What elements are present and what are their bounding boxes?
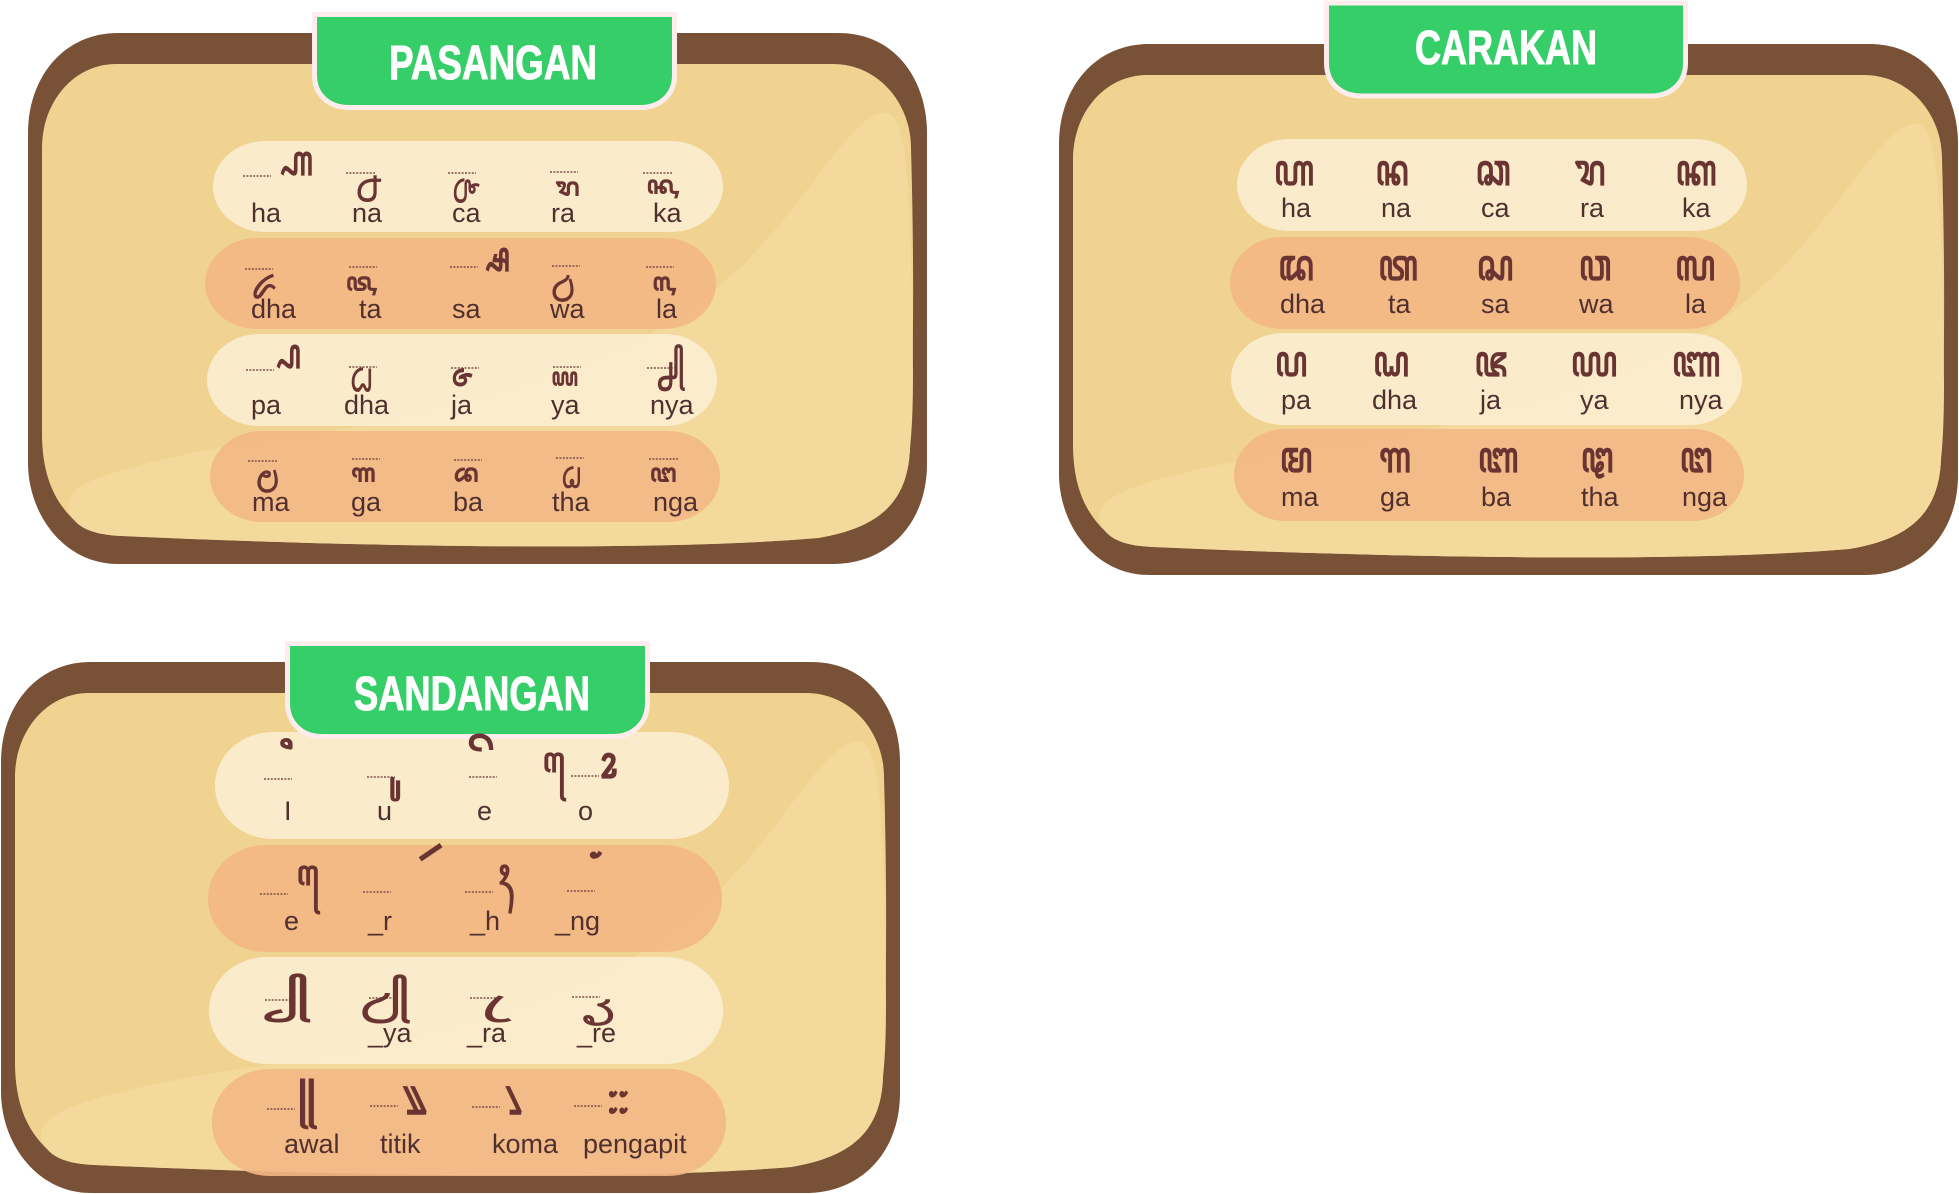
row pill: sandangan row 4 — [212, 1069, 726, 1176]
panel: sandangan — [1, 644, 900, 1193]
mark: pengapit — [574, 1070, 687, 1159]
letter: pasangan ka: ka — [653, 198, 682, 228]
letter: pasangan ya — [551, 341, 581, 420]
letter: pasangan ca — [448, 149, 482, 228]
mark: taling e: e — [284, 906, 299, 936]
letter: pasangan la: la — [656, 294, 678, 324]
letter: pasangan ra: ra — [551, 198, 576, 228]
letter: pasangan ba: ba — [453, 487, 484, 517]
row pill: carakan row 1 — [1237, 139, 1747, 231]
letter: pasangan ha — [243, 137, 313, 228]
mark: layar r: _r — [367, 906, 392, 936]
mark: keret re — [572, 972, 616, 1048]
letter: carakan ta: ꦠ — [1378, 242, 1418, 290]
row pill: sandangan row 1 — [215, 732, 729, 839]
letter: carakan ya: ꦪ — [1571, 338, 1617, 386]
mark: cecak ng: _ng — [554, 906, 600, 936]
row pill: carakan row 4 — [1234, 429, 1744, 521]
panel frame: carakan — [1059, 44, 1958, 575]
mark: pepet e: ꦼ — [468, 734, 502, 785]
letter: pasangan ga: ga — [351, 487, 382, 517]
mark: suku u — [367, 753, 400, 826]
row pill: pasangan row 4 — [210, 431, 720, 522]
mark: wulu I: ꦶ — [280, 736, 303, 783]
mark: cecak ng: ꦁ — [590, 842, 604, 905]
letter: carakan ka: ꦏ — [1675, 147, 1717, 195]
mark: taling tarung o — [542, 739, 617, 826]
letter: pasangan nya: nya — [650, 390, 695, 420]
letter: carakan ga — [1379, 434, 1411, 512]
letter: carakan ra: ꦫ — [1575, 147, 1605, 195]
heading tab: CARAKAN: CARAKAN — [1415, 22, 1597, 75]
letter: carakan ca: ca — [1481, 193, 1510, 223]
mark: pangkon: ꧀ — [265, 962, 310, 1022]
letter: carakan dha: dha — [1372, 385, 1418, 415]
letter: carakan na: na — [1381, 193, 1412, 223]
panel: carakan — [1059, 3, 1958, 575]
letter: carakan dha — [1372, 338, 1418, 415]
letter: carakan na — [1375, 147, 1412, 223]
letter: pasangan ma: ꧀ꦩ — [258, 440, 278, 493]
mark: taling tarung o: ꦴ — [589, 739, 617, 788]
letter: pasangan nga: ꧀ꦔ — [651, 438, 677, 482]
letter: carakan nga — [1680, 434, 1728, 512]
letter: carakan tha — [1581, 434, 1620, 512]
row pill: sandangan row 2 — [208, 845, 722, 952]
mark: pengkal ya — [362, 963, 413, 1048]
letter: carakan sa — [1477, 242, 1513, 319]
letter: carakan ta — [1378, 242, 1418, 319]
row pill: pasangan row 2 — [205, 238, 716, 329]
letter: pasangan ga: ꧀ꦒ — [352, 438, 376, 482]
letter: pasangan tha — [552, 441, 591, 517]
letter: carakan ma — [1280, 434, 1319, 512]
mark: wignyan h: _h — [469, 906, 500, 936]
heading tab: PASANGAN — [314, 14, 674, 108]
mark: pengapit: ꧇꧇ — [607, 1070, 629, 1127]
mark: koma: ꧈ — [505, 1069, 522, 1126]
mark: pengkal ya: _ya — [367, 1018, 413, 1048]
letter: pasangan ta: ta — [359, 294, 383, 324]
letter: carakan ka: ka — [1682, 193, 1712, 223]
mark: cecak ng — [554, 842, 604, 936]
mark: taling e — [260, 854, 328, 936]
mark: cakra ra: ꦿ — [482, 992, 512, 1023]
letter: pasangan ca: ca — [452, 198, 482, 228]
mark: titik: ꧉ — [403, 1069, 427, 1126]
letter: pasangan ma: ma — [252, 487, 290, 517]
letter: carakan wa: wa — [1578, 289, 1614, 319]
letter: pasangan ta: ꧀ꦠ — [347, 247, 377, 295]
mark: taling e: ꦺ — [296, 854, 328, 915]
mark: koma — [472, 1069, 559, 1159]
row pill: pasangan row 1 — [213, 141, 723, 232]
mark: keret re: ꦽ — [583, 972, 613, 1026]
letter: pasangan ja — [450, 330, 479, 420]
mark: titik: titik — [380, 1129, 421, 1159]
mark: wignyan h — [465, 853, 514, 936]
letter: carakan na: ꦤ — [1375, 147, 1409, 195]
letter: carakan ca — [1475, 147, 1511, 223]
letter: carakan tha: tha — [1581, 482, 1620, 512]
letter: carakan ca: ꦕ — [1475, 147, 1511, 195]
letter: pasangan na: ꧀ꦤ — [358, 149, 381, 202]
heading tab: SANDANGAN: SANDANGAN — [354, 668, 590, 721]
letter: pasangan ya: ya — [551, 390, 580, 420]
letter: pasangan sa: sa — [452, 294, 482, 324]
letter: carakan la — [1675, 242, 1715, 319]
mark: taling tarung o: o — [578, 796, 593, 826]
letter: pasangan ka: ꧀ꦏ — [648, 150, 679, 198]
mark: taling tarung o: ꦺ — [542, 741, 574, 802]
letter: pasangan nya: ꧀ꦚ — [658, 333, 685, 391]
letter: carakan ra — [1575, 147, 1605, 223]
mark: wignyan h: ꦃ — [490, 853, 514, 914]
heading tab: CARAKAN — [1326, 3, 1686, 96]
letter: pasangan na: na — [352, 198, 383, 228]
letter: carakan pa: ꦥ — [1275, 338, 1307, 386]
mark: awal — [267, 1066, 340, 1159]
letter: carakan ba: ba — [1481, 482, 1512, 512]
letter: carakan wa — [1578, 242, 1614, 319]
letter: pasangan nga: nga — [653, 487, 699, 517]
letter: pasangan dha: ꧀ꦝ — [352, 339, 372, 392]
letter: carakan ma: ꦩ — [1280, 434, 1312, 482]
letter: carakan nya: ꦚ — [1672, 338, 1720, 386]
letter: carakan pa — [1275, 338, 1312, 415]
letter: pasangan sa — [450, 233, 510, 324]
letter: pasangan ka — [643, 150, 682, 228]
mark: awal: awal — [284, 1129, 340, 1159]
letter: carakan ja — [1474, 338, 1508, 415]
heading tab: PASANGAN: PASANGAN — [389, 37, 597, 90]
mark: suku u: ꦸ — [386, 753, 400, 801]
letter: carakan nya — [1672, 338, 1724, 415]
letter: carakan ma: ma — [1281, 482, 1319, 512]
letter: pasangan pa — [246, 330, 301, 420]
letter: pasangan dha: dha — [344, 390, 390, 420]
letter: carakan ta: ta — [1388, 289, 1412, 319]
letter: carakan ya — [1571, 338, 1617, 415]
letter: pasangan ga — [351, 438, 382, 517]
letter: pasangan da — [245, 246, 297, 324]
panel frame: pasangan — [28, 33, 927, 564]
mark: keret re: _re — [576, 1018, 616, 1048]
letter: carakan sa: sa — [1481, 289, 1510, 319]
letter: pasangan ma — [248, 440, 290, 517]
letter: pasangan nga — [649, 438, 699, 517]
mark: titik — [370, 1069, 427, 1159]
letter: carakan pa: pa — [1281, 385, 1312, 415]
letter: carakan wa: ꦮ — [1579, 242, 1611, 290]
letter: pasangan da: dha — [251, 294, 297, 324]
letter: pasangan tha: tha — [552, 487, 591, 517]
mark: suku u: u — [377, 796, 392, 826]
mark: awal: ꧋ — [297, 1066, 317, 1129]
letter: carakan la: la — [1685, 289, 1707, 319]
row pill: carakan row 2 — [1230, 237, 1740, 329]
letter: pasangan la — [646, 247, 678, 324]
letter: pasangan wa: wa — [549, 294, 585, 324]
letter: carakan sa: ꦱ — [1477, 242, 1513, 290]
letter: carakan ba — [1478, 434, 1518, 512]
letter: pasangan dha — [344, 339, 390, 420]
mark: cakra ra — [466, 992, 512, 1048]
row pill: pasangan row 3 — [207, 334, 717, 426]
letter: carakan nga: nga — [1682, 482, 1728, 512]
letter: carakan ka — [1675, 147, 1717, 223]
letter: carakan ra: ra — [1580, 193, 1605, 223]
mark: layar r: ꦂ — [419, 843, 442, 906]
letter: carakan da: ꦢ — [1278, 242, 1314, 290]
mark: cakra ra: _ra — [466, 1018, 507, 1048]
letter: pasangan wa — [549, 249, 585, 324]
letter: pasangan ra: ꧀ꦫ — [556, 152, 580, 196]
letter: pasangan ba — [453, 438, 484, 517]
letter: carakan la: ꦭ — [1675, 242, 1715, 290]
letter: carakan ba: ꦧ — [1478, 434, 1518, 482]
letter: pasangan wa: ꧀ꦮ — [553, 249, 573, 302]
letter: pasangan pa: pa — [251, 390, 282, 420]
letter: carakan ja: ja — [1479, 385, 1502, 415]
letter: pasangan ja: ꧀ꦗ — [453, 330, 474, 387]
letter: carakan ga: ga — [1380, 482, 1411, 512]
letter: carakan ha: ha — [1281, 193, 1312, 223]
mark: wulu I — [264, 736, 303, 826]
letter: pasangan nya — [647, 333, 695, 420]
letter: pasangan ba: ꧀ꦧ — [455, 438, 479, 482]
row pill: sandangan row 3 — [209, 957, 723, 1064]
letter: carakan tha: ꦛ — [1581, 434, 1613, 482]
letter: pasangan na — [346, 149, 383, 228]
letter: pasangan pa: ꧀ꦥ — [267, 330, 301, 377]
letter: pasangan ra — [550, 152, 580, 228]
mark: pepet e: e — [477, 796, 492, 826]
mark: koma: koma — [492, 1129, 559, 1159]
letter: carakan nga: ꦔ — [1680, 434, 1712, 482]
panel: pasangan — [28, 14, 927, 564]
letter: carakan ya: ya — [1580, 385, 1610, 415]
letter: carakan dha: ꦝ — [1373, 338, 1409, 386]
letter: carakan ha: ꦲ — [1274, 147, 1314, 195]
letter: carakan ja: ꦗ — [1474, 338, 1508, 386]
letter: pasangan da: ꧀ꦢ — [253, 246, 276, 299]
row pill: carakan row 3 — [1231, 333, 1742, 425]
mark: pangkon — [265, 962, 310, 1022]
letter: pasangan ya: ꧀ꦪ — [552, 341, 578, 386]
letter: pasangan ca: ꧀ꦕ — [453, 149, 480, 203]
letter: carakan da — [1278, 242, 1326, 319]
heading tab: SANDANGAN — [288, 644, 648, 736]
letter: pasangan ta — [347, 247, 383, 324]
mark: layar r — [363, 843, 442, 936]
letter: pasangan sa: ꧀ꦱ — [476, 233, 510, 280]
mark: wulu I: I — [284, 796, 292, 826]
letter: pasangan ja: ja — [450, 390, 473, 420]
letter: pasangan ha: ꧀ꦲ — [271, 137, 313, 184]
letter: carakan ha — [1274, 147, 1314, 223]
panel frame: sandangan — [1, 662, 900, 1193]
letter: pasangan la: ꧀ꦭ — [654, 247, 676, 295]
letter: pasangan tha: ꧀ꦛ — [563, 441, 581, 489]
mark: pengapit: pengapit — [583, 1129, 687, 1159]
letter: pasangan ha: ha — [251, 198, 282, 228]
letter: carakan nya: nya — [1679, 385, 1724, 415]
letter: carakan da: dha — [1280, 289, 1326, 319]
mark: pengkal ya: ꦾ — [362, 963, 409, 1024]
mark: pepet e — [468, 734, 502, 826]
letter: carakan ga: ꦒ — [1379, 434, 1411, 482]
